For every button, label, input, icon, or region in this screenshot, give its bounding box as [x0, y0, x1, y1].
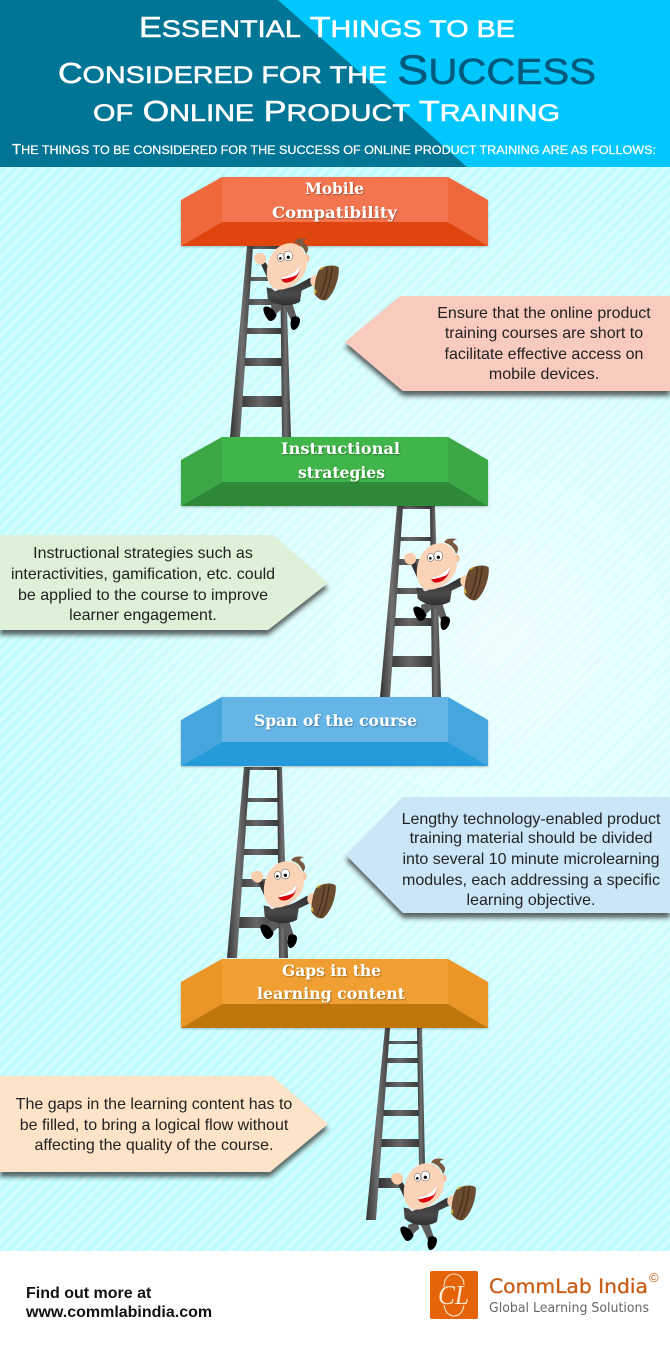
- logo: CommLab India: CommLab India: [489, 1275, 648, 1298]
- logo: CommLab India: Global Learning Solutions: [489, 1300, 649, 1316]
- callout: span of the course: into several 10 minute microlearning: [402, 851, 660, 868]
- callout: mobile compatibility: Ensure that the online product: [437, 305, 651, 322]
- callout: span of the course: modules, each addressing a specific: [402, 872, 660, 889]
- heading: instructional strategies: [281, 439, 400, 482]
- icon: climbing man 2: [404, 539, 489, 630]
- footer link text: [25, 1285, 212, 1321]
- title: SUCCESS: [397, 46, 596, 93]
- platform: mobile compatibility: [181, 177, 488, 246]
- callout: span of the course: [346, 797, 670, 913]
- header banner: [0, 0, 670, 167]
- ladder 1: [230, 246, 291, 437]
- heading: gaps in the learning content: [257, 961, 406, 1003]
- footer link text: Find out more at: [26, 1285, 152, 1302]
- callout: gaps in the learning content: affecting the quality of the course.: [35, 1137, 273, 1154]
- platform: span of the course: [181, 697, 488, 766]
- callout: instructional strategies: learner engagement.: [69, 607, 217, 624]
- heading: mobile compatibility: [272, 179, 398, 222]
- title: CONSIDERED FOR THE: [58, 58, 387, 90]
- platform: gaps in the learning content: [181, 959, 488, 1028]
- callout: instructional strategies: Instructional strategies such as: [33, 545, 253, 562]
- logo: CommLab India: [430, 1270, 659, 1319]
- callout: gaps in the learning content: be filled, to bring a logical flow without: [20, 1117, 289, 1134]
- callout: instructional strategies: interactivities, gamification, etc. could: [11, 566, 275, 583]
- heading: instructional strategies: Instructional: [281, 439, 400, 458]
- callout: mobile compatibility: facilitate effective access on: [445, 346, 643, 363]
- heading: mobile compatibility: Mobile: [305, 179, 364, 198]
- title: [58, 12, 596, 128]
- heading: instructional strategies: strategies: [298, 463, 385, 482]
- ladder 3: [227, 767, 288, 958]
- ladder 4: [366, 1028, 425, 1220]
- callout: instructional strategies: [0, 535, 328, 630]
- callout: span of the course: Lengthy technology-enabled product: [402, 811, 661, 828]
- platform: instructional strategies: [181, 437, 488, 506]
- callout: gaps in the learning content: The gaps in the learning content has to: [16, 1096, 292, 1113]
- title: ESSENTIAL THINGS TO BE: [139, 12, 515, 44]
- ladder 2: [380, 506, 441, 697]
- title: OF ONLINE PRODUCT TRAINING: [93, 96, 560, 128]
- icon: climbing man 4: [391, 1159, 476, 1250]
- logo: CommLab India: CL: [438, 1280, 469, 1310]
- callout: gaps in the learning content: [0, 1076, 328, 1172]
- heading: mobile compatibility: Compatibility: [272, 203, 398, 222]
- heading: gaps in the learning content: Gaps in the: [282, 961, 381, 980]
- icon: climbing man 3: [251, 857, 336, 948]
- logo: CommLab India: ©: [649, 1270, 659, 1285]
- callout: mobile compatibility: mobile devices.: [489, 366, 599, 383]
- icon: climbing man 1: [254, 239, 339, 330]
- callout: span of the course: learning objective.: [467, 892, 595, 909]
- callout: span of the course: training material should be divided: [410, 830, 652, 847]
- heading: gaps in the learning content: learning content: [257, 984, 406, 1003]
- footer link text: www.commlabindia.com: [25, 1304, 212, 1321]
- heading: span of the course: Span of the course: [254, 711, 417, 730]
- callout: mobile compatibility: [345, 296, 670, 391]
- callout: mobile compatibility: training courses are short to: [445, 325, 643, 342]
- subtitle: THE THINGS TO BE CONSIDERED FOR THE SUCCESS OF ONLINE PRODUCT TRAINING ARE AS FOLLOWS:: [12, 142, 656, 158]
- callout: instructional strategies: be applied to the course to improve: [18, 587, 268, 604]
